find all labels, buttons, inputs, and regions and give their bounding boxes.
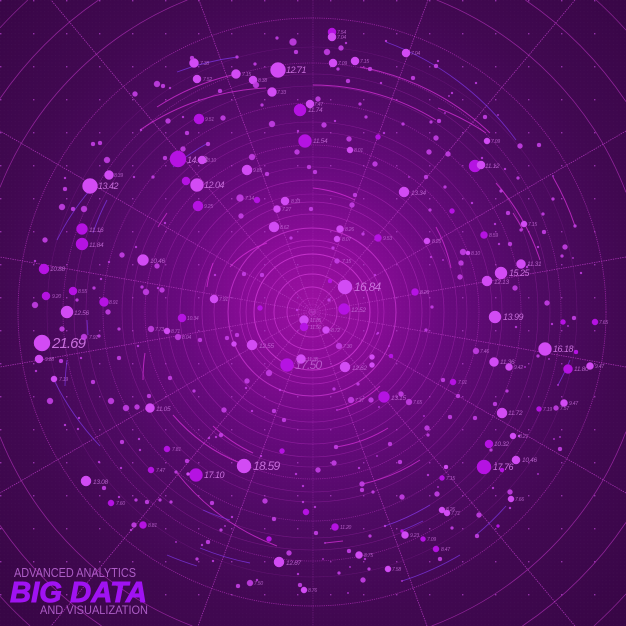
node 10.46 south-east: 10.46 <box>522 457 537 464</box>
node 11.54: 11.54 <box>313 138 328 145</box>
node 16.84 <box>338 280 382 294</box>
data points: north-east quadrant: 7.15 <box>528 222 537 228</box>
data points: north-east quadrant: 8.59 <box>489 233 498 239</box>
node 12.52: 12.52 <box>351 307 366 314</box>
node 16.84: 16.84 <box>354 280 382 294</box>
node 13.15: 13.15 <box>391 395 406 402</box>
node 13.99 <box>489 311 524 323</box>
data points: north-east quadrant: 7.09 <box>338 61 347 67</box>
node 10.46 south-east <box>512 456 537 464</box>
data points: south-west quadrant: 7.47 <box>156 468 165 474</box>
node 10.32 <box>485 440 509 448</box>
data points: south-east quadrant: 8.47 <box>441 547 450 553</box>
data points: north-east quadrant: 8.01 <box>354 148 363 154</box>
node 11.80: 11.80 <box>574 366 589 373</box>
data points: north-west quadrant: 8.10 <box>207 158 216 164</box>
node 11.16 <box>76 224 104 234</box>
node 21.69 <box>34 335 87 352</box>
data points: south-west quadrant: 8.71 <box>171 329 180 335</box>
data points: north-west quadrant: 8.62 <box>280 225 289 231</box>
data points: south-east quadrant: 7.46 <box>480 349 489 355</box>
node 13.34: 13.34 <box>411 190 426 197</box>
data points: north-west quadrant: 8.39 <box>114 173 123 179</box>
node 10.46 <box>138 254 165 266</box>
data points: south-east quadrant: 8.21 <box>519 434 528 440</box>
node 12.13 <box>482 276 509 286</box>
node 12.55 <box>247 340 274 350</box>
node 15.25: 15.25 <box>509 268 531 278</box>
data points: north-east quadrant: 7.15 <box>342 259 351 265</box>
data points: south-east quadrant: 7.19 <box>543 407 552 413</box>
data points: centre cluster: 8.72 <box>331 328 340 334</box>
node 18.59: 18.59 <box>253 459 281 473</box>
data points: south-east quadrant <box>314 316 608 594</box>
data points: south-west quadrant: 7.19 <box>59 377 68 383</box>
node 13.42: 13.42 <box>98 181 119 191</box>
data points: south-east quadrant: 9.42 <box>514 365 523 371</box>
data points: south-west quadrant: 8.04 <box>182 335 191 341</box>
node 11.36: 11.36 <box>500 359 515 366</box>
node 13.42 <box>82 178 119 194</box>
data points: north-east quadrant: 8.07 <box>342 237 351 243</box>
title line: big data: BIG DATA <box>10 577 147 609</box>
node 12.52 <box>338 304 366 314</box>
data points: south-east quadrant: 7.57 <box>560 406 569 412</box>
data points: north-west quadrant: 7.15 <box>242 72 251 78</box>
data points: north-west quadrant: 8.33 <box>291 199 300 205</box>
node 12.13: 12.13 <box>494 279 509 286</box>
node 12.67: 12.67 <box>286 560 301 567</box>
data points: north-east quadrant: 8.25 <box>432 239 441 245</box>
data points: south-west quadrant <box>34 314 317 594</box>
data points: north-east quadrant: 8.26 <box>420 290 429 296</box>
data points: north-west quadrant: 9.20 <box>52 294 61 300</box>
node 11.31: 11.31 <box>527 261 542 268</box>
node 16.18 <box>538 342 574 356</box>
data points: centre cluster: 11.50 <box>310 325 322 331</box>
node 11.72: 11.72 <box>508 410 523 417</box>
data points: south-east quadrant: 7.01 <box>458 380 467 386</box>
data points: north-west quadrant: 8.55 <box>78 289 87 295</box>
node 13.34 <box>399 187 426 197</box>
node 12.71 <box>270 62 307 78</box>
data points: south-west quadrant: 9.88 <box>45 357 54 363</box>
node 11.84: 11.84 <box>89 242 104 249</box>
data points: north-west quadrant: 9.25 <box>204 204 213 210</box>
node 12.62 <box>340 362 367 372</box>
node 17.50: 17.50 <box>295 358 323 372</box>
data points: north-east quadrant: 8.10 <box>471 251 480 257</box>
data points: north-east quadrant: 9.53 <box>383 236 392 242</box>
data points: south-west quadrant: 7.60 <box>116 501 125 507</box>
node 12.62: 12.62 <box>352 365 367 372</box>
node 13.99: 13.99 <box>503 312 524 322</box>
node 14.68: 14.68 <box>187 155 208 165</box>
node 11.36 <box>490 358 515 366</box>
data points: north-west quadrant: 7.91 <box>219 297 228 303</box>
data points: south-west quadrant: 8.76 <box>308 588 317 594</box>
data points: north-west quadrant: 7.27 <box>282 207 291 213</box>
data points: south-east quadrant: 7.30 <box>343 344 352 350</box>
node 16.18: 16.18 <box>553 344 574 354</box>
data points: south-east quadrant: 7.37 <box>355 398 364 404</box>
data points: north-west quadrant: 7.33 <box>277 90 286 96</box>
node 12.67 <box>274 557 301 567</box>
node 13.15 <box>378 392 406 402</box>
data points: south-east quadrant: 7.65 <box>599 320 608 326</box>
node 10.46: 10.46 <box>150 258 165 265</box>
node 11.31 <box>516 260 542 268</box>
node 18.59 <box>237 459 281 473</box>
data points: south-east quadrant: 8.26 <box>446 507 455 513</box>
data points: south-east quadrant: 9.47 <box>595 364 604 370</box>
node 11.84 <box>76 238 104 250</box>
bright orbit trails <box>54 42 575 581</box>
node 13.08: 13.08 <box>93 479 108 486</box>
data points: north-west quadrant: 7.52 <box>203 77 212 83</box>
data points: south-east quadrant: 7.58 <box>392 567 401 573</box>
data points: south-east quadrant: 7.09 <box>427 537 436 543</box>
data points: south-east quadrant: 7.15 <box>446 476 455 482</box>
data points: south-west quadrant: 10.34 <box>187 316 199 322</box>
node 11.72 <box>497 408 523 418</box>
data points: south-west quadrant: 7.73 <box>155 327 164 333</box>
node 11.16: 11.16 <box>89 227 104 234</box>
data points: centre cluster: 11.85 <box>310 318 322 324</box>
data points: north-east quadrant: 8.26 <box>345 227 354 233</box>
data points: south-east quadrant: 8.75 <box>364 553 373 559</box>
node 11.12: 11.12 <box>485 163 500 170</box>
node 14.68 <box>170 151 208 167</box>
node 11.12 <box>469 160 500 172</box>
node 15.25 <box>495 267 531 279</box>
node 12.55: 12.55 <box>259 343 274 350</box>
node 17.76 <box>477 460 514 474</box>
data points: north-east quadrant: 7.04 <box>411 51 420 57</box>
data points: north-east quadrant: 7.47 <box>314 102 323 108</box>
node 10.88: 10.88 <box>50 266 65 273</box>
data points: north-east quadrant: 7.54 <box>337 30 346 36</box>
node 17.10: 17.10 <box>204 470 225 480</box>
node 12.56: 12.56 <box>74 310 89 317</box>
data points: south-west quadrant: 8.81 <box>148 523 157 529</box>
node 11.05: 11.05 <box>156 406 171 413</box>
data points: south-east quadrant: 9.47 <box>569 401 578 407</box>
data points: north-west quadrant: 9.85 <box>253 168 262 174</box>
data points: north-west quadrant: 9.51 <box>205 117 214 123</box>
data points: north-west quadrant: 7.38 <box>200 61 209 67</box>
node 11.05 <box>146 404 171 413</box>
data points: south-west quadrant: 7.81 <box>172 447 181 453</box>
data points: south-east quadrant: 7.66 <box>515 497 524 503</box>
data points: south-east quadrant: 9.23 <box>410 533 419 539</box>
node 17.10 <box>190 468 225 482</box>
node 12.56 <box>61 306 89 318</box>
data points: south-east quadrant: 7.71 <box>451 511 460 517</box>
data points: north-west quadrant: 7.14 <box>245 196 254 202</box>
data points: south-east quadrant: 7.65 <box>413 400 422 406</box>
data points: south-east quadrant: 11.20 <box>340 525 352 531</box>
data points: centre cluster <box>280 316 379 372</box>
node 12.04: 12.04 <box>204 180 225 190</box>
node 17.76: 17.76 <box>493 462 514 472</box>
node 12.04 <box>190 178 225 192</box>
data points: centre cluster: 11.35 <box>307 357 319 363</box>
data points: south-west quadrant: 7.50 <box>254 581 263 587</box>
node 21.69: 21.69 <box>51 335 87 352</box>
data points: north-east quadrant: 7.15 <box>360 59 369 65</box>
data points: north-east quadrant: 7.09 <box>491 139 500 145</box>
data points: south-west quadrant: 7.91 <box>89 335 98 341</box>
node 11.74 <box>294 104 323 116</box>
data points: north-east quadrant: 7.04 <box>337 35 346 41</box>
data points: north-west quadrant: 8.91 <box>109 300 118 306</box>
title line: and visualization: AND VISUALIZATION <box>40 603 148 617</box>
node 10.88 <box>39 264 65 274</box>
node 11.74: 11.74 <box>308 107 323 114</box>
node 13.08 <box>81 476 108 486</box>
node 12.71: 12.71 <box>286 65 307 75</box>
data points: north-west quadrant: 8.38 <box>258 78 267 84</box>
title line: advanced analytics: ADVANCED ANALYTICS <box>14 566 136 580</box>
node 11.80 <box>564 364 589 374</box>
node 11.54 <box>298 134 328 148</box>
data points: north-east quadrant <box>296 28 582 323</box>
title block <box>10 566 148 617</box>
data points: north-west quadrant <box>32 36 328 318</box>
node 10.32: 10.32 <box>494 441 509 448</box>
